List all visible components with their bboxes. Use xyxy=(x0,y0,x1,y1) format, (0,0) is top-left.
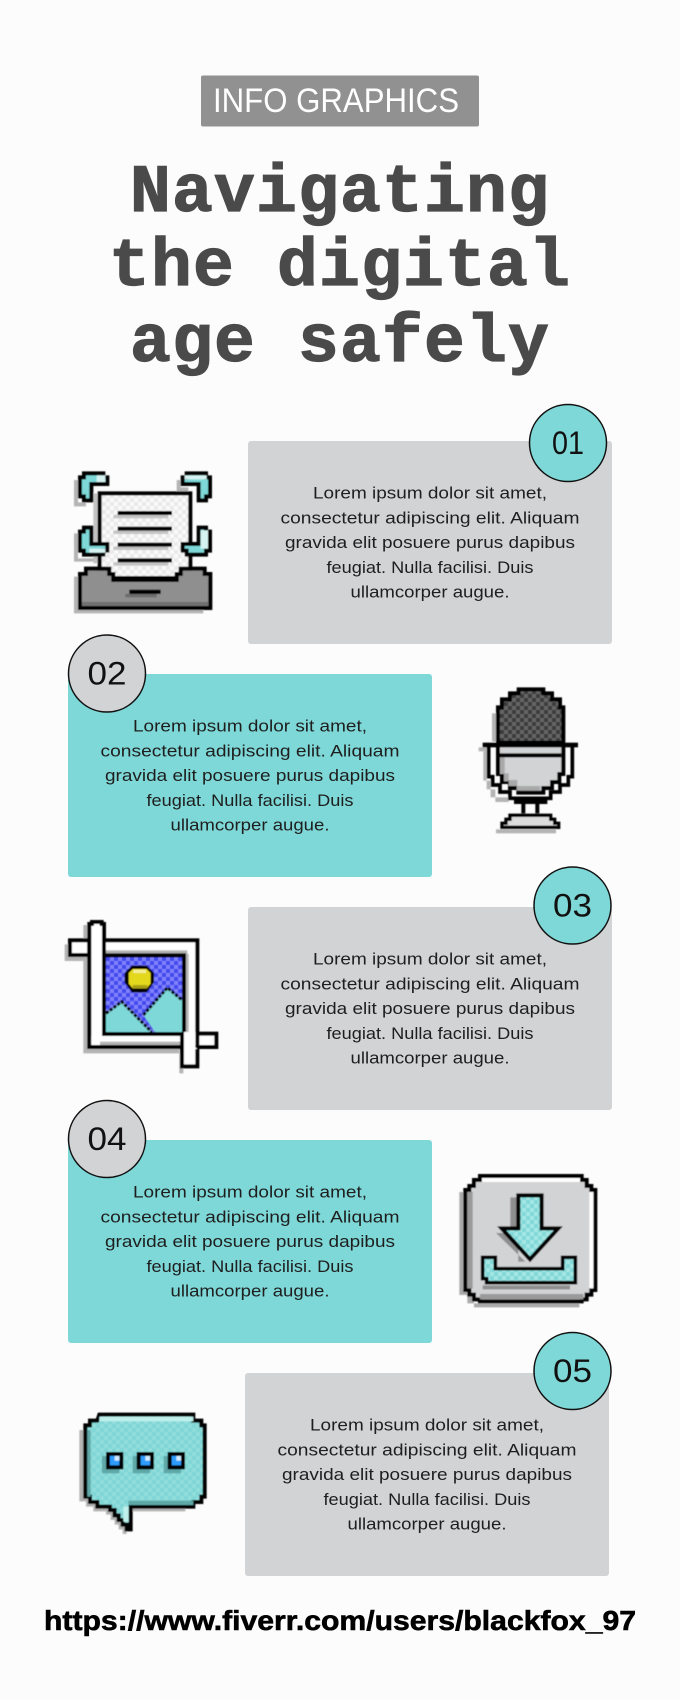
text: step 02 body: Lorem ipsum dolor sit amet, xyxy=(133,716,367,736)
tray xyxy=(80,569,210,608)
text: step 03 body: ullamcorper augue. xyxy=(350,1048,510,1068)
shadows xyxy=(65,925,183,1073)
title xyxy=(109,155,571,382)
icon: microphone xyxy=(479,689,578,833)
number badge: 04: 04 xyxy=(88,1121,126,1157)
panel: step 04 xyxy=(68,1100,432,1343)
text: step 05 body: Lorem ipsum dolor sit amet, xyxy=(310,1416,544,1434)
title: the digital xyxy=(109,229,571,306)
stubs xyxy=(70,940,89,955)
panel: step 01 xyxy=(248,404,612,644)
icon: document tray xyxy=(74,473,210,613)
text: step 01 body xyxy=(280,484,580,602)
arrow xyxy=(496,1197,525,1262)
text: step 05 body: ullamcorper augue. xyxy=(348,1514,506,1534)
badge: info graphics: INFO GRAPHICS xyxy=(213,82,459,120)
sun xyxy=(125,966,154,992)
number badge: 05: 05 xyxy=(553,1353,592,1389)
shadow xyxy=(459,1192,579,1307)
number badge: 01 xyxy=(530,404,606,482)
stem xyxy=(514,800,547,804)
number badge: 05 xyxy=(534,1332,611,1410)
icon: download xyxy=(459,1176,595,1307)
text: step 02 body xyxy=(100,716,400,834)
text: step 04 body: gravida elit posuere purus dapibus xyxy=(105,1232,395,1251)
text: step 02 body: feugiat. Nulla facilisi. Duis xyxy=(146,791,354,810)
text: step 05 body xyxy=(278,1416,576,1534)
box xyxy=(465,1176,595,1301)
text: step 04 body: feugiat. Nulla facilisi. Duis xyxy=(146,1257,354,1276)
text: step 02 body: ullamcorper augue. xyxy=(170,816,330,834)
bubble xyxy=(85,1415,205,1529)
text: step 03 body: Lorem ipsum dolor sit amet, xyxy=(313,950,547,968)
picture xyxy=(104,955,184,1034)
corner brackets xyxy=(80,473,107,500)
body xyxy=(498,745,563,793)
text: step 01 body: feugiat. Nulla facilisi. Duis xyxy=(326,558,534,577)
shadows xyxy=(479,713,556,833)
text: step 04 body xyxy=(100,1182,400,1300)
text: step 01 body: gravida elit posuere purus dapibus xyxy=(285,533,575,552)
text: step 01 body: Lorem ipsum dolor sit amet, xyxy=(313,484,547,502)
text: step 04 body: ullamcorper augue. xyxy=(170,1282,330,1300)
number badge: 04 xyxy=(68,1100,146,1178)
paper xyxy=(100,493,190,578)
frame xyxy=(89,940,197,1047)
number badge: 03: 03 xyxy=(553,888,592,924)
title: Navigating xyxy=(130,155,550,232)
yoke xyxy=(489,745,572,798)
icon: image crop xyxy=(65,922,216,1073)
text: step 03 body: consectetur adipiscing elit. Aliquam xyxy=(280,974,580,993)
text: step 01 body: consectetur adipiscing elit. Aliquam xyxy=(280,508,580,527)
text: step 04 body: Lorem ipsum dolor sit amet, xyxy=(133,1182,367,1202)
number badge: 02 xyxy=(68,635,146,712)
panel: step 02 xyxy=(68,635,432,877)
text: step 02 body: consectetur adipiscing elit. Aliquam xyxy=(100,741,400,760)
dots xyxy=(102,1456,181,1473)
text: step 04 body: consectetur adipiscing elit. Aliquam xyxy=(100,1207,400,1226)
tray xyxy=(479,1261,570,1289)
panel: step 03 xyxy=(248,867,612,1110)
text: step 03 body: gravida elit posuere purus dapibus xyxy=(285,999,575,1018)
stems xyxy=(99,557,191,569)
text: step 02 body: gravida elit posuere purus dapibus xyxy=(105,766,395,785)
text: step 03 body: feugiat. Nulla facilisi. Duis xyxy=(326,1024,534,1043)
crop bars xyxy=(89,922,104,1047)
shadows xyxy=(74,480,203,613)
head xyxy=(498,689,563,743)
footer: url: https://www.fiverr.com/users/blackfox_97 xyxy=(44,1605,636,1636)
shadow xyxy=(79,1419,185,1534)
base xyxy=(502,815,559,827)
panel: step 05 xyxy=(245,1332,611,1576)
icon: chat bubble xyxy=(79,1415,205,1534)
number badge: 03 xyxy=(534,867,611,944)
number badge: 02: 02 xyxy=(88,656,126,692)
title: age safely xyxy=(130,305,550,382)
mountains xyxy=(106,1002,152,1032)
number badge: 01: 01 xyxy=(552,425,584,461)
text: step 01 body: ullamcorper augue. xyxy=(350,582,510,602)
text: step 05 body: feugiat. Nulla facilisi. Duis xyxy=(324,1490,530,1509)
text: step 05 body: consectetur adipiscing elit. Aliquam xyxy=(278,1440,576,1459)
text: step 03 body xyxy=(280,950,580,1068)
text: step 05 body: gravida elit posuere purus dapibus xyxy=(282,1465,572,1484)
